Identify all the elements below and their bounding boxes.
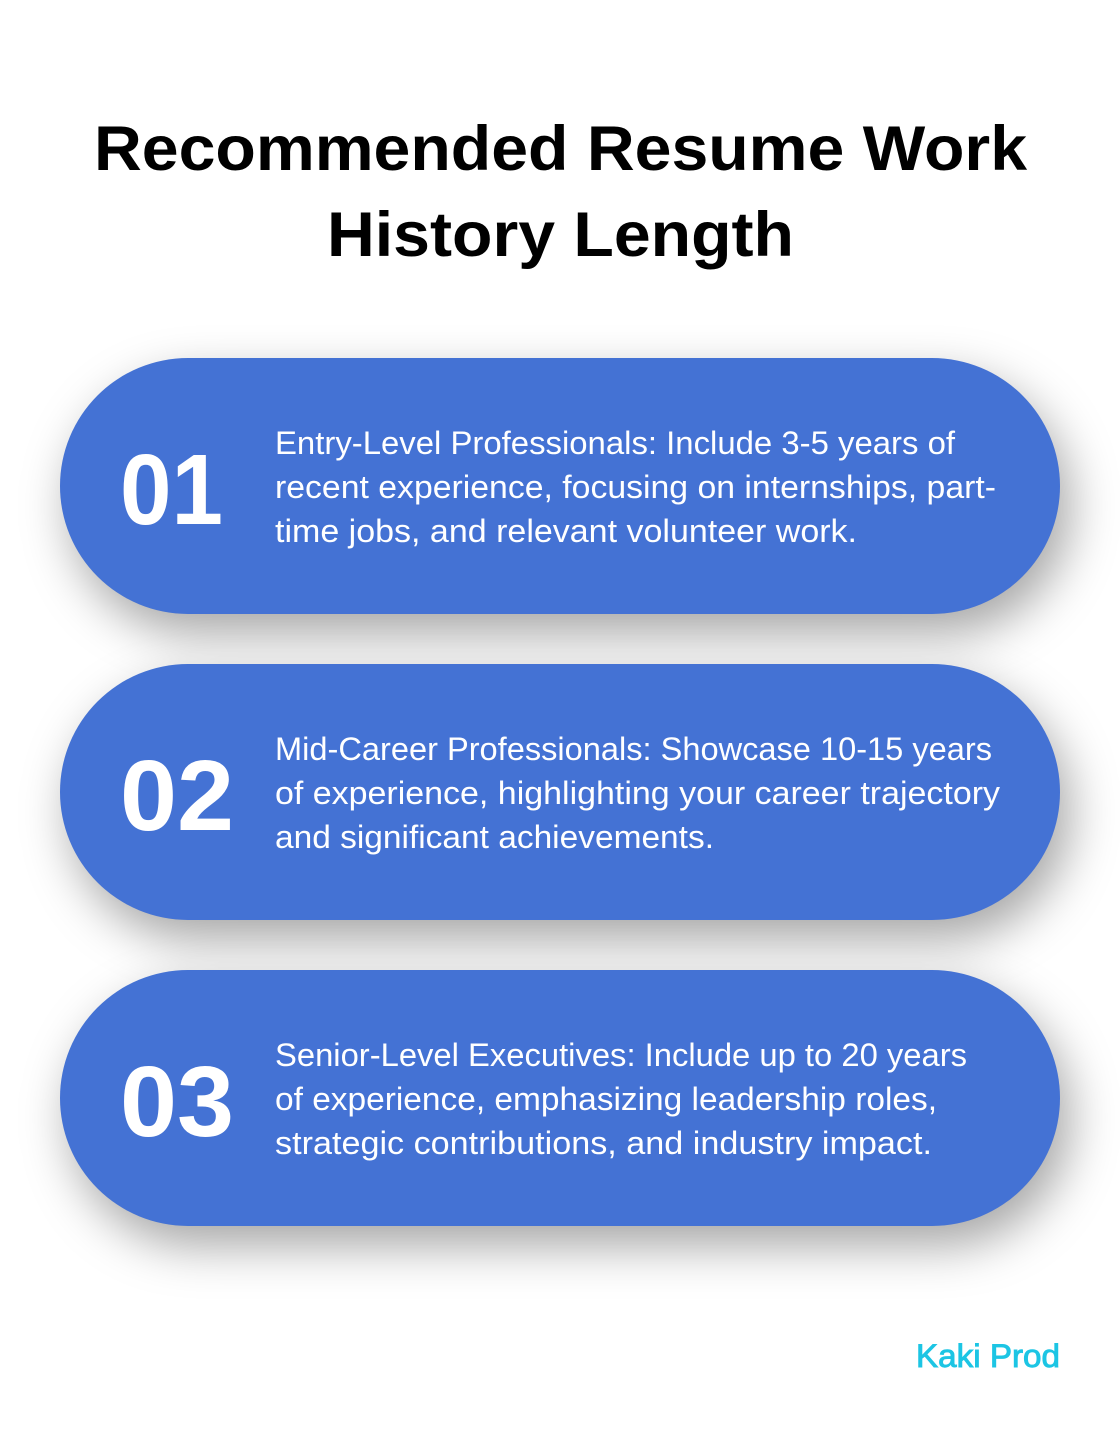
panel: step 03 senior-level: Senior-Level Executives: Include up to 20 years [275, 1037, 967, 1073]
panel: step 02 mid-career: Mid-Career Professionals: Showcase 10-15 years [275, 731, 992, 767]
panel: step 01 entry-level: Entry-Level Professionals: Include 3-5 years of [275, 425, 955, 461]
panel: step 01 entry-level: recent experience, focusing on internships, part- [275, 469, 996, 505]
panel: step 02 mid-career [60, 664, 1070, 940]
panel: step 02 mid-career: 02 [120, 740, 234, 852]
panel: step 03 senior-level [60, 970, 1070, 1246]
panel: step 03 senior-level: 03 [120, 1046, 234, 1158]
panel: step 02 mid-career: of experience, highlighting your career trajectory [275, 775, 1000, 811]
title: History Length [327, 200, 794, 270]
panel: step 01 entry-level: time jobs, and relevant volunteer work. [275, 513, 857, 549]
panel: step 02 mid-career: and significant achievements. [275, 819, 714, 855]
title [94, 114, 1028, 270]
title: Recommended Resume Work [94, 114, 1028, 184]
panel: step 01 entry-level [60, 358, 1070, 634]
logo: Kaki Prod: Kaki Prod [916, 1338, 1060, 1374]
panel: step 03 senior-level: strategic contributions, and industry impact. [275, 1125, 932, 1161]
panel: step 01 entry-level: 01 [120, 434, 223, 546]
panel: step 03 senior-level: of experience, emphasizing leadership roles, [275, 1081, 937, 1117]
